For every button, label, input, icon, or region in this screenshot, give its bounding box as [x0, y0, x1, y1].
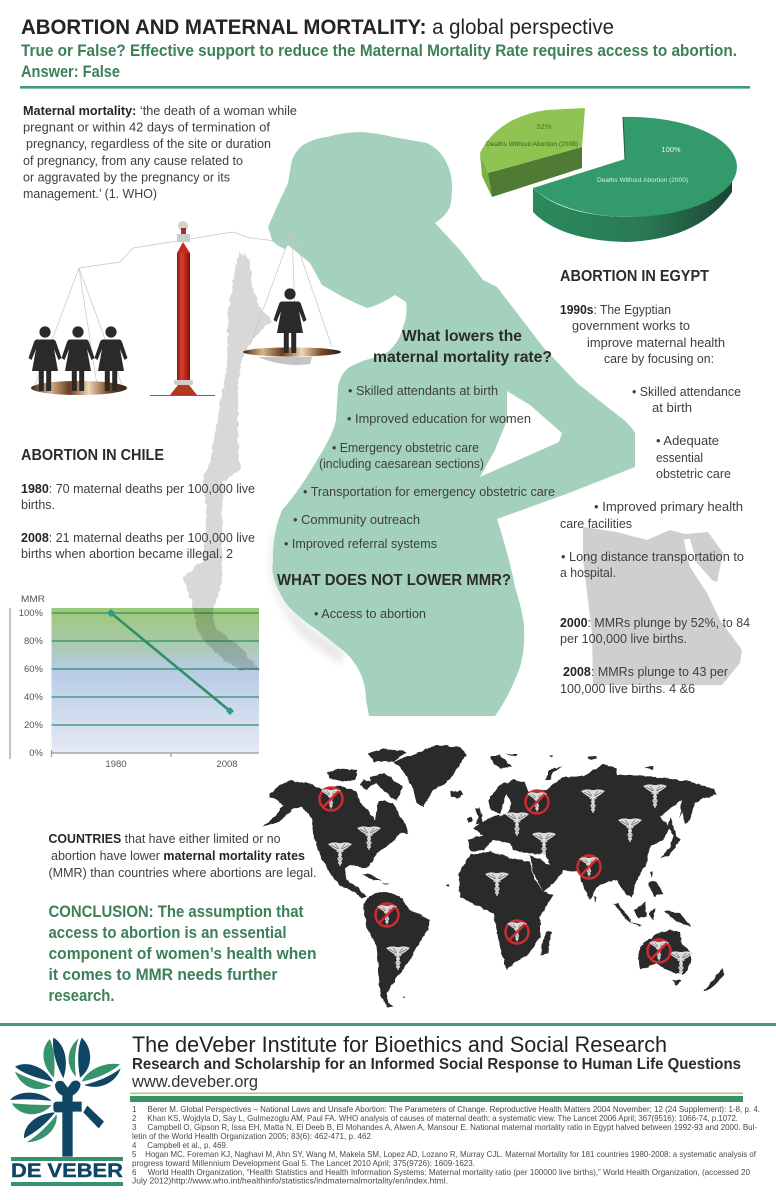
- Egypt text: care facilities: [560, 516, 632, 531]
- list: what lowers: • Skilled attendants at birth: [348, 383, 498, 398]
- world map: [262, 745, 725, 1007]
- axis labels: 20%: [24, 720, 44, 731]
- website: www.deveber.org: [131, 1072, 258, 1091]
- references: [132, 1104, 760, 1186]
- list: access: • Access to abortion: [314, 606, 426, 621]
- definition of maternal mortality: Maternal mortality: ‘the death of a woman while: [23, 103, 297, 118]
- axis labels: 0%: [29, 748, 44, 759]
- heading: what lowers: [373, 328, 552, 366]
- countries text: abortion have lower maternal mortality rates: [51, 848, 305, 863]
- panel: abortion in Chile: [21, 447, 255, 561]
- logo bars and wordmark: [11, 1157, 123, 1186]
- prohibited caduceus icons: [320, 788, 670, 962]
- institute name: The deVeber Institute for Bioethics and Social Research: [132, 1032, 667, 1057]
- Egypt text: improve maternal health: [587, 335, 725, 350]
- list: what lowers: (including caesarean sections): [319, 456, 484, 471]
- heading: what lowers: maternal mortality rate?: [373, 349, 552, 366]
- axis labels: [19, 594, 238, 770]
- axis labels: 80%: [24, 636, 44, 647]
- definition of maternal mortality: pregnancy, regardless of the site or duration: [26, 136, 271, 151]
- countries text: [48, 831, 316, 880]
- Egypt text: a hospital.: [560, 565, 616, 580]
- list: what lowers: • Emergency obstetric care: [332, 440, 479, 455]
- left pan: [31, 381, 127, 395]
- scale beam and chains: [35, 231, 332, 385]
- Egypt text: care by focusing on:: [604, 351, 714, 366]
- references: letin of the World Health Organization 2005; 83(6): 462-471, p. 462: [132, 1131, 371, 1141]
- large slice 2000: [533, 117, 737, 242]
- conclusion: [48, 902, 316, 1005]
- references: 5 Hogan MC, Foreman KJ, Naghavi M, Ahn SY, Wang M, Makela SM, Lopez AD, Lozano R, Murray CJL. Maternal Mortality for 181 countries 1980-2008: a systematic analysis of: [132, 1149, 757, 1159]
- list: what lowers: • Improved education for women: [347, 411, 531, 426]
- Egypt text: [560, 302, 750, 696]
- right pan: [243, 347, 341, 365]
- list: what lowers: [284, 383, 555, 551]
- line chart: Chile MMR: [10, 594, 259, 770]
- Chile text: births when abortion became illegal. 2: [21, 546, 233, 561]
- scale pole: [150, 221, 215, 396]
- Egypt text: 1990s: The Egyptian: [560, 302, 671, 317]
- Egypt text: 2008: MMRs plunge to 43 per: [563, 664, 729, 679]
- deVeber logo: [10, 1038, 123, 1186]
- conclusion: research.: [48, 986, 114, 1005]
- Americas and Greenland: [262, 745, 467, 1007]
- 3D pie chart: deaths without abortion: [480, 108, 737, 242]
- axis labels: 100%: [19, 608, 44, 619]
- Egypt text: • Long distance transportation to: [561, 549, 744, 564]
- Egypt text: obstetric care: [656, 466, 731, 481]
- definition of maternal mortality: of pregnancy, from any cause related to: [23, 153, 243, 168]
- small slice 2008: [480, 108, 585, 197]
- references: 3 Campbell O, Gipson R, Issa EH, Matta N, El Deeb B, El Mohandes A, Alwen A, Mansour E. National maternal mortality ratio in Egypt halved between 1992-93 and 2000. Bul-: [132, 1122, 757, 1132]
- Egypt text: • Skilled attendance: [632, 384, 741, 399]
- Egypt text: • Adequate: [656, 433, 719, 448]
- Chile text: 2008: 21 maternal deaths per 100,000 live: [21, 530, 255, 545]
- pie labels: Deaths Without Abortion (2008): [486, 141, 578, 148]
- Egypt text: 100,000 live births. 4 &6: [560, 681, 695, 696]
- panel: what lowers MMR: [277, 328, 555, 621]
- definition of maternal mortality: pregnant or within 42 days of termination of: [23, 120, 270, 134]
- definition of maternal mortality: [23, 103, 297, 201]
- axis labels: MMR: [21, 594, 45, 605]
- Chile text: births.: [21, 497, 55, 512]
- definition of maternal mortality: management.’ (1. WHO): [23, 186, 157, 201]
- balance scale with women: [28, 221, 341, 396]
- institute tagline: Research and Scholarship for an Informed Social Response to Human Life Questions: [132, 1056, 741, 1073]
- pie labels: [486, 122, 688, 184]
- Chile text: [21, 481, 255, 561]
- heading: ABORTION IN EGYPT: [560, 268, 709, 285]
- Egypt text: 2000: MMRs plunge by 52%, to 84: [560, 615, 750, 630]
- Egypt text: essential: [656, 450, 703, 465]
- conclusion: CONCLUSION: The assumption that: [48, 902, 304, 921]
- heading: what lowers: What lowers the: [402, 328, 522, 345]
- caduceus icons: [328, 784, 693, 975]
- logo bars and wordmark: DE VEBER: [11, 1161, 123, 1182]
- list: what lowers: • Improved referral systems: [284, 536, 437, 551]
- panel: abortion in Egypt: [560, 268, 750, 696]
- axis labels: 60%: [24, 664, 44, 675]
- definition of maternal mortality: or aggravated by the pregnancy or its: [23, 170, 230, 184]
- references: 6 World Health Organization, “Health Statistics and Health Information Systems: Maternal mortality ratio (per 100000 live births),” World Health Organization, (accessed 20: [132, 1167, 750, 1177]
- pie labels: 100%: [661, 145, 681, 154]
- map of Chile: [183, 252, 272, 670]
- references: 2 Khan KS, Wojdyla D, Say L, Gulmezoglu AM, Paul FA. WHO analysis of causes of maternal death: a systematic view. The Lancet 2006 April; 367(9516): 1066-74, p.1072.: [132, 1113, 738, 1123]
- countries text: (MMR) than countries where abortions are legal.: [48, 865, 316, 880]
- pregnant woman silhouette: [268, 132, 635, 716]
- Egypt text: government works to: [572, 318, 690, 333]
- three women: [28, 326, 128, 391]
- references: 1 Berer M. Global Perspectives – National Laws and Unsafe Abortion: The Parameters of Change. Reproductive Health Matters 2004 November; 12 (24 Supplement): 1-8, p. 4.: [132, 1104, 760, 1114]
- axis labels: 1980: [105, 759, 127, 770]
- data line: [107, 609, 234, 715]
- map of Egypt: [583, 527, 742, 685]
- Egypt text: per 100,000 live births.: [560, 631, 687, 646]
- title: ABORTION AND MATERNAL MORTALITY: a global perspective: [21, 15, 614, 39]
- countries text: COUNTRIES that have either limited or no: [48, 831, 280, 846]
- list: what lowers: • Community outreach: [293, 512, 420, 527]
- single woman: [274, 288, 306, 353]
- Egypt text: at birth: [652, 400, 692, 415]
- Egypt text: • Improved primary health: [594, 499, 743, 514]
- list: what lowers: • Transportation for emergency obstetric care: [303, 484, 555, 499]
- subtitle question: True or False? Effective support to reduce the Maternal Mortality Rate requires access to abortion.: [21, 42, 737, 60]
- heading: ABORTION IN CHILE: [21, 447, 164, 464]
- references: 4 Campbell et al., p. 469.: [132, 1140, 228, 1150]
- logo tree: [10, 1038, 121, 1157]
- Chile text: 1980: 70 maternal deaths per 100,000 live: [21, 481, 255, 496]
- conclusion: component of women’s health when: [48, 944, 316, 963]
- references: progress toward Millennium Development Goal 5. The Lancet 2010 April; 375(9726): 1609-1623.: [132, 1158, 475, 1168]
- conclusion: it comes to MMR needs further: [48, 965, 278, 984]
- pie labels: Deaths Without Abortion (2000): [597, 177, 688, 184]
- answer: Answer: False: [21, 63, 120, 81]
- pie labels: 52%: [536, 122, 552, 131]
- references: July 2012)http://www.who.int/healthinfo/statistics/indmaternalmortality/en/index.html.: [132, 1176, 448, 1186]
- axis labels: 2008: [216, 759, 238, 770]
- axis labels: 40%: [24, 692, 44, 703]
- Eurasia, Africa and Australia: [458, 754, 725, 992]
- heading: what does not lower: WHAT DOES NOT LOWER MMR?: [277, 572, 511, 589]
- conclusion: access to abortion is an essential: [48, 923, 286, 942]
